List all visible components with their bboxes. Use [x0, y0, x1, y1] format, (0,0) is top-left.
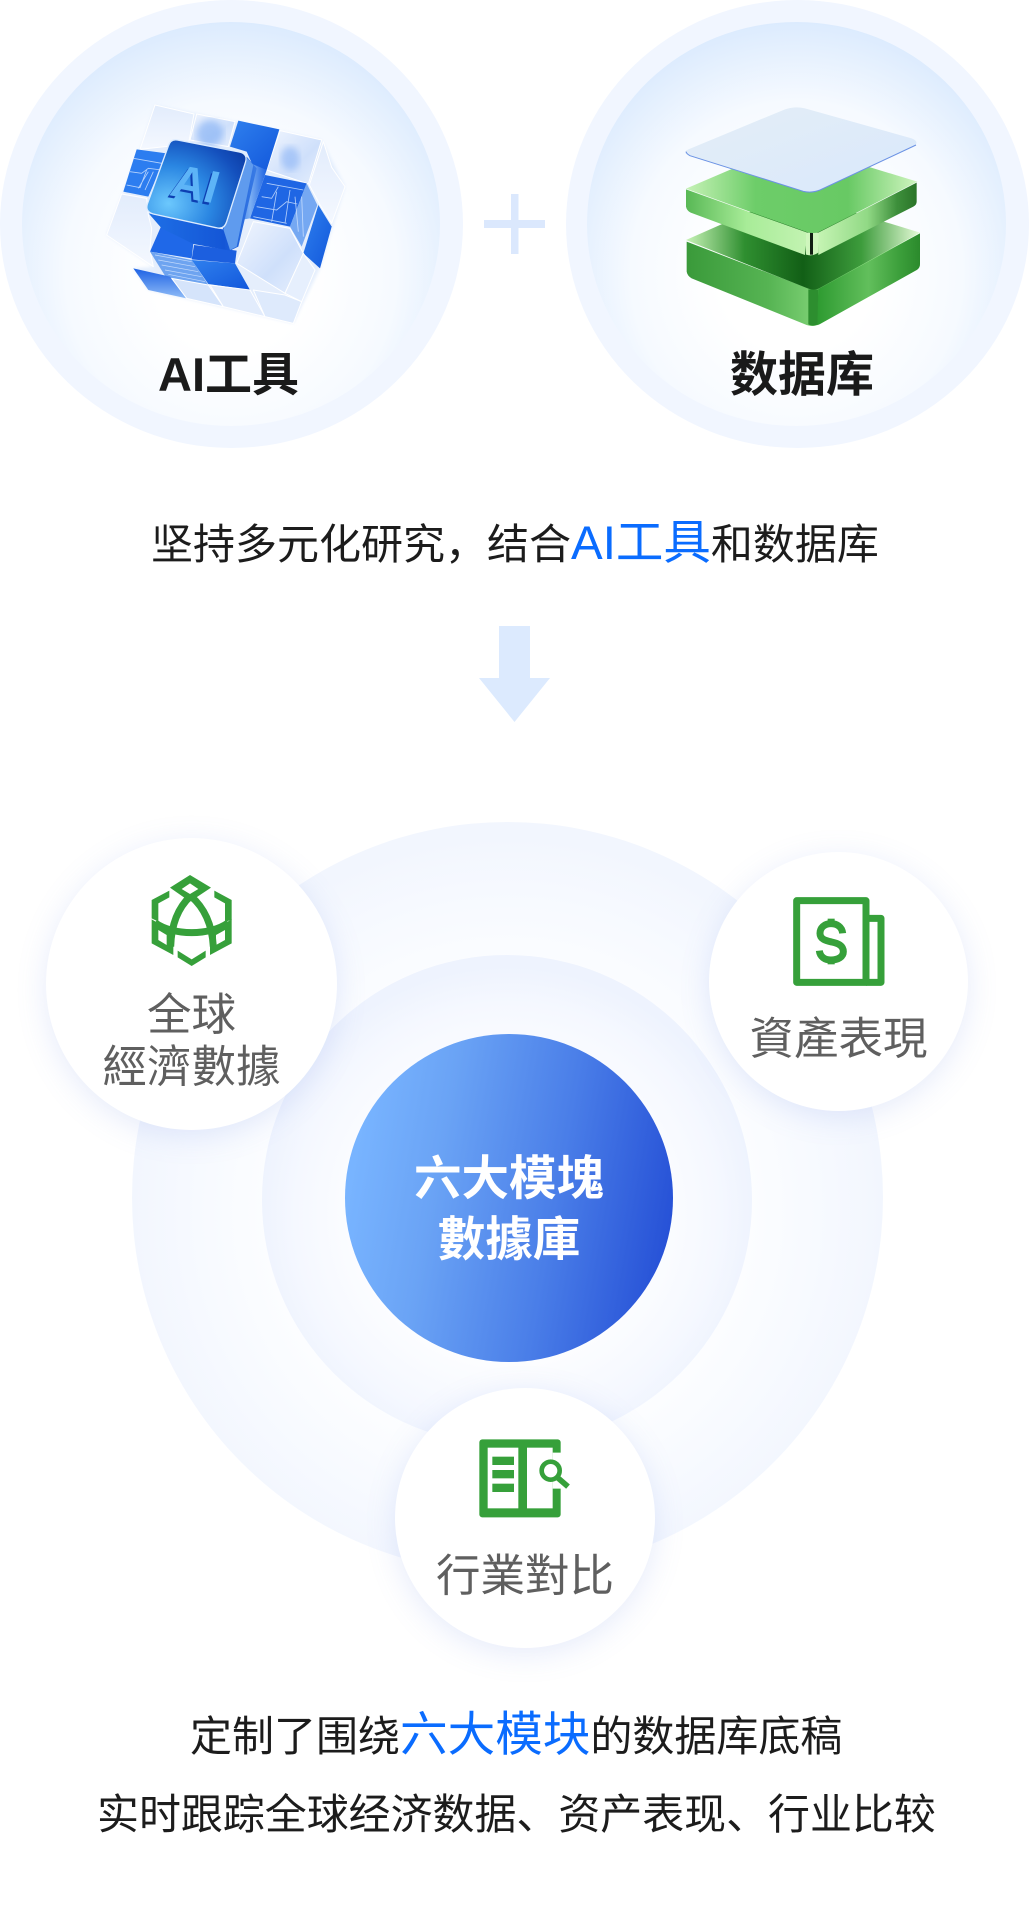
- icon: AI glass cube: [108, 104, 344, 324]
- arrow: down: [479, 626, 550, 722]
- glass hull: [107, 105, 345, 323]
- diagram: concentric circles: [132, 822, 883, 1573]
- node: asset performance: [709, 852, 968, 1111]
- node: industry comparison: [395, 1388, 655, 1648]
- center circle: six module database: [345, 1034, 673, 1362]
- text: diversified research line: 坚持多元化研究，结合AI工具和数据库: [151, 517, 879, 570]
- label: 全球: [147, 991, 236, 1040]
- blue cells: [230, 121, 279, 170]
- icon: green database stack: [685, 108, 920, 326]
- inner ring: [262, 955, 752, 1445]
- back glass cells: [107, 105, 345, 267]
- label: 資產表現: [749, 1015, 928, 1064]
- heading: AI tool: AI工具: [158, 348, 299, 401]
- node: global economic data: [46, 838, 337, 1130]
- key top: [147, 140, 246, 228]
- lower blue cells: [150, 225, 193, 258]
- bottom layer: [686, 193, 920, 326]
- center label: 數據庫: [438, 1214, 580, 1267]
- key side: [149, 157, 257, 251]
- AI label: AI: [165, 155, 226, 213]
- icon: book with magnifier: [479, 1439, 570, 1518]
- text: tracking line: 实时跟踪全球经济数据、资产表现、行业比较: [97, 1791, 936, 1838]
- panel: AI tool circle: [0, 0, 463, 448]
- text: custom database line: 定制了围绕六大模块的数据库底稿: [190, 1709, 842, 1762]
- middle layer: [686, 143, 917, 255]
- inner gradient disc: [587, 22, 1006, 426]
- inner gradient disc: [22, 22, 440, 426]
- label: 行業對比: [436, 1552, 614, 1601]
- circuit lines: [127, 158, 303, 237]
- lower cells: [133, 268, 187, 298]
- label: [102, 991, 280, 1092]
- icon: hexagon globe: [152, 875, 232, 966]
- icon: plus: [484, 194, 545, 254]
- center label: [414, 1153, 604, 1267]
- AI label: AI: [164, 157, 224, 215]
- label: 經濟數據: [102, 1043, 280, 1092]
- top plate: [685, 107, 917, 192]
- panel: database circle: [566, 0, 1029, 448]
- heading: database: 数据库: [730, 349, 874, 402]
- center label: 六大模塊: [414, 1153, 604, 1206]
- icon: dollar document: [793, 897, 884, 986]
